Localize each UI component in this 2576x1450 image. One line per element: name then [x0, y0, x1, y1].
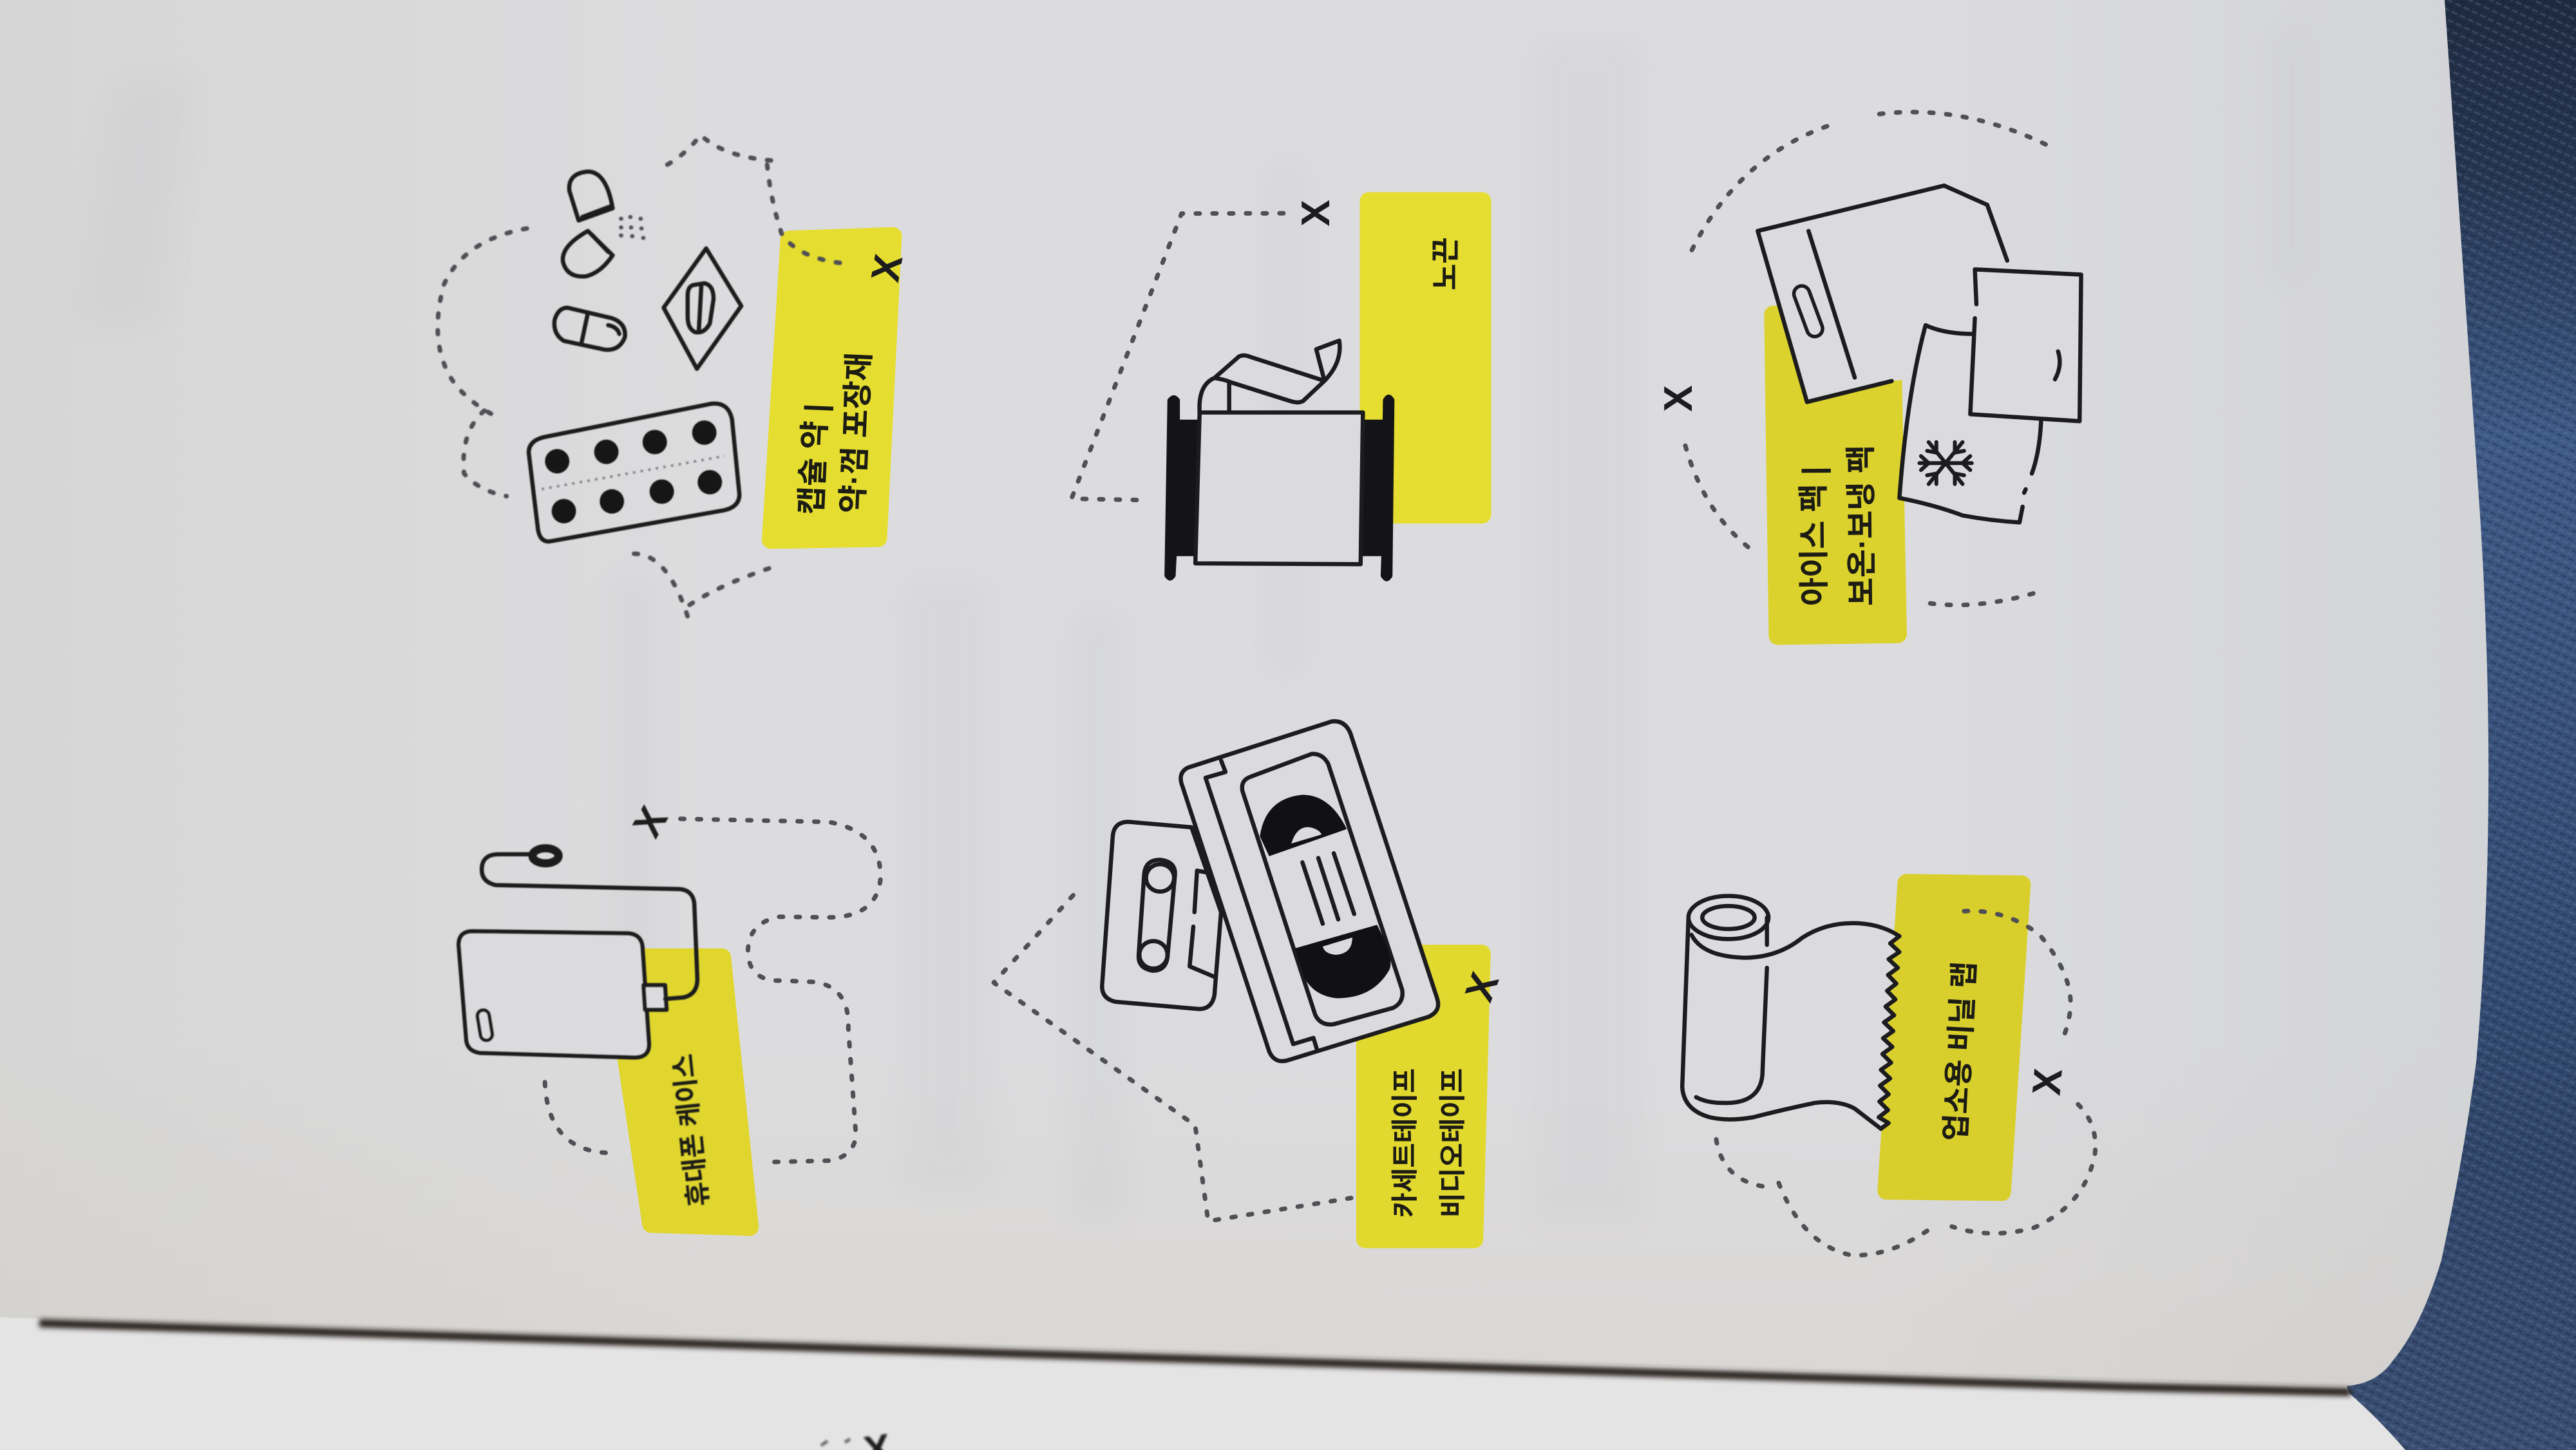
- panel: phone case: [459, 800, 880, 1227]
- label text: 업소용 비닐 랩: [1938, 961, 1982, 1142]
- yellow label: [1369, 201, 1482, 514]
- label text: 비디오테이프: [1437, 1068, 1468, 1218]
- x mark: X: [863, 251, 911, 285]
- yellow label: [771, 236, 893, 540]
- label text: [1797, 445, 1880, 606]
- label text: [795, 352, 877, 515]
- yellow label: [1886, 883, 2022, 1192]
- icon: cassette tape: [1102, 822, 1221, 1009]
- dotted cut outline: [1072, 213, 1283, 500]
- x mark: X: [1656, 385, 1701, 412]
- yellow label: [1773, 315, 1898, 636]
- label text: 보온·보냉 팩: [1844, 445, 1880, 606]
- yellow label: [611, 957, 750, 1227]
- panel: ice pack: [1656, 112, 2081, 636]
- dotted cut outline: [1685, 112, 2054, 605]
- x mark: X: [1457, 967, 1508, 1007]
- dotted cut outline: [1716, 911, 2096, 1256]
- label text: 휴대폰 케이스: [668, 1053, 714, 1208]
- panel: commercial plastic wrap: [1682, 883, 2096, 1256]
- gutter shadow: [39, 1323, 2351, 1392]
- x mark: X: [1294, 200, 1338, 227]
- dotted cut outline: [438, 135, 852, 617]
- x mark: X: [2024, 1067, 2071, 1097]
- panel: twine / tape: [1072, 200, 1482, 581]
- icon: bag and ice packs: [1757, 185, 2081, 522]
- label text: 노끈: [1429, 237, 1462, 290]
- panel: capsules and gum packaging: [438, 135, 911, 617]
- x mark: X: [625, 800, 676, 845]
- yellow label: [1365, 954, 1482, 1239]
- icon: spool: [1164, 341, 1394, 581]
- x mark fragment on next page: [821, 1426, 893, 1450]
- label text: 약·껌 포장재: [836, 352, 877, 514]
- label text: 아이스 팩 |: [1797, 466, 1832, 606]
- dotted cut outline: [994, 895, 1358, 1221]
- icon: VHS tape: [1180, 721, 1438, 1061]
- label text: 카세트테이프: [1390, 1068, 1420, 1218]
- icon: wrap roll: [1682, 896, 1899, 1129]
- icon: pills and blister pack: [529, 172, 741, 541]
- label text: [1390, 1068, 1468, 1218]
- panel: cassette and video tape: [994, 721, 1508, 1239]
- icon: phone case and cable: [459, 849, 697, 1057]
- bleed-through text from reverse page: [72, 26, 2312, 1223]
- dotted cut outline: [545, 819, 880, 1162]
- lower page: [0, 1307, 2405, 1450]
- label text: 캡슐 약 |: [795, 403, 834, 515]
